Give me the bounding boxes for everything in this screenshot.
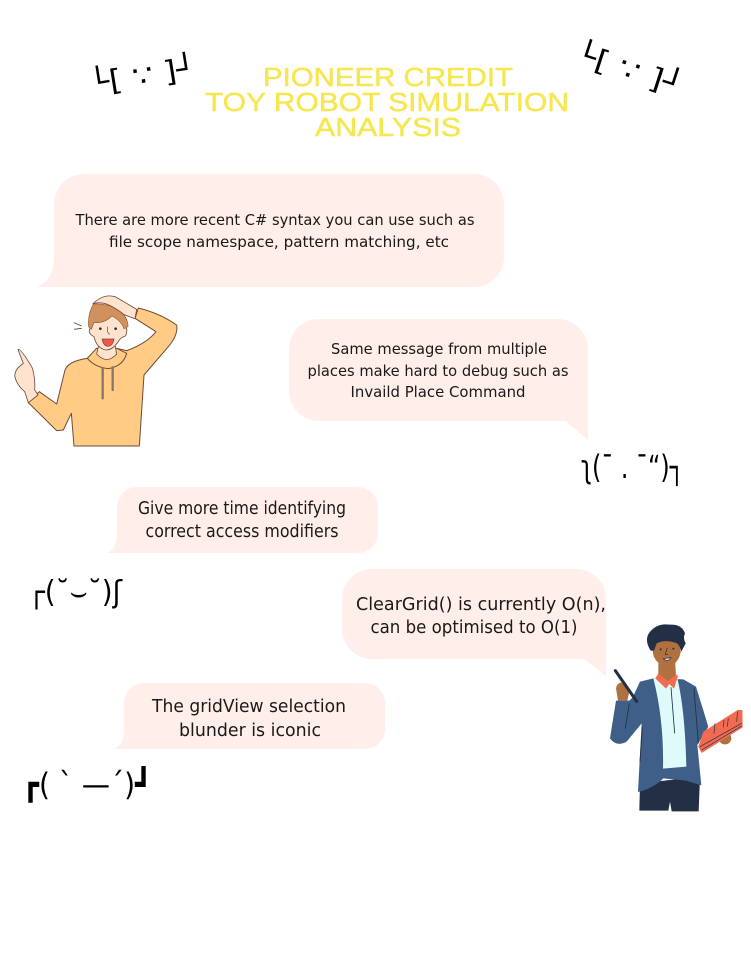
neck xyxy=(658,660,676,682)
face details xyxy=(74,323,117,346)
hoodie body and arms xyxy=(28,308,177,446)
speech bubble: same message: Same message from multiple xyxy=(331,340,547,358)
hand under book xyxy=(719,732,731,744)
hood xyxy=(87,348,127,369)
blazer xyxy=(610,678,708,792)
hand holding pen xyxy=(616,683,629,701)
title: ANALYSIS xyxy=(315,114,461,142)
hair xyxy=(647,624,686,652)
title: TOY ROBOT SIMULATION xyxy=(205,89,569,117)
speech bubble: access modifiers: Give more time identifying xyxy=(138,499,346,519)
speech bubble: same message: places make hard to debug such as xyxy=(308,362,568,380)
trousers xyxy=(639,777,700,811)
open book xyxy=(698,710,743,753)
kaomoji: shrug left: ┌(˘⌣˘)ʃ xyxy=(28,575,123,610)
drawstrings xyxy=(103,367,113,398)
speech bubble: ClearGrid xyxy=(342,569,606,676)
pointing hand xyxy=(15,349,38,403)
shirt xyxy=(653,678,686,769)
speech bubble: same message: Invaild Place Command xyxy=(350,383,526,401)
speech bubble: C# syntax xyxy=(36,174,504,287)
speech bubble: same message xyxy=(289,319,588,440)
head xyxy=(89,313,127,350)
head xyxy=(652,638,681,667)
speech bubble: access modifiers: correct access modifiers xyxy=(146,522,338,542)
character: man in yellow hoodie xyxy=(15,296,177,446)
collar xyxy=(655,673,678,689)
title xyxy=(205,64,569,142)
speech bubble: ClearGrid: can be optimised to O(1) xyxy=(370,618,578,638)
speech bubble: ClearGrid: ClearGrid() is currently O(n), xyxy=(356,595,606,615)
face details xyxy=(660,648,674,660)
speech bubble: C# syntax: file scope namespace, pattern matching, etc xyxy=(109,233,449,251)
neck xyxy=(97,345,117,359)
book lines xyxy=(700,712,742,750)
speech bubble: access modifiers xyxy=(107,487,378,553)
character: man in blue blazer xyxy=(610,624,743,811)
hair xyxy=(88,304,128,329)
speech bubble: gridView blunder: The gridView selection xyxy=(151,697,346,717)
shirt placket and blazer folds xyxy=(625,687,698,762)
kaomoji: top left: └[ ∵ ]┘ xyxy=(87,49,199,101)
pen xyxy=(615,671,637,701)
kaomoji: annoyed: ┏( ` —´)┛ xyxy=(22,765,152,803)
raised hand on head xyxy=(93,296,137,319)
title: PIONEER CREDIT xyxy=(263,64,513,92)
kaomoji: top right: └[ ∵ ]┘ xyxy=(571,35,688,103)
speech bubble: C# syntax: There are more recent C# syntax you can use such as xyxy=(75,211,475,229)
speech bubble: gridView blunder: blunder is iconic xyxy=(179,721,321,741)
speech bubble: gridView blunder xyxy=(114,683,385,749)
kaomoji: shrug right: ʅ(¯ . ¯“)┐ xyxy=(581,448,684,486)
